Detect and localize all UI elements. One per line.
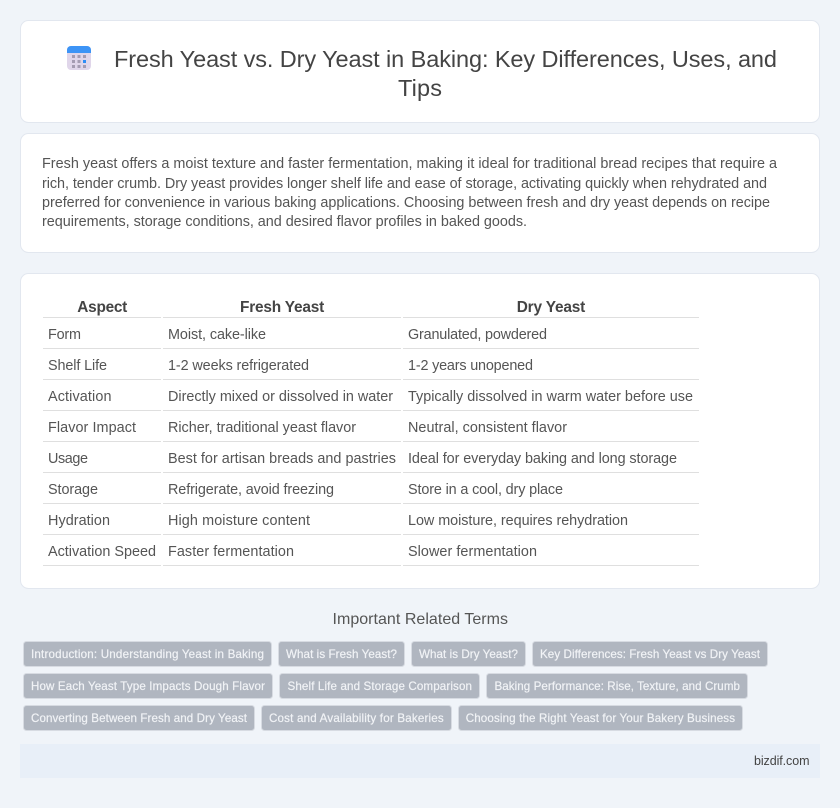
chip: cost and availability xyxy=(262,706,452,730)
row: activation: Activation xyxy=(48,389,112,405)
row: form: Moist, cake-like xyxy=(168,327,266,343)
row: hydration: Low moisture, requires rehydration xyxy=(408,513,628,529)
chip: converting xyxy=(24,706,254,730)
row: flavor impact: Neutral, consistent flavor xyxy=(408,420,567,436)
chip: choosing the right yeast xyxy=(458,706,742,730)
chip: choosing the right yeast: Choosing the Right Yeast for Your Bakery Business xyxy=(466,712,735,725)
panel: title card xyxy=(20,20,820,122)
row: usage: Best for artisan breads and pastries xyxy=(168,451,396,467)
row: usage xyxy=(48,451,677,467)
chip: what is dry yeast: What is Dry Yeast? xyxy=(419,648,519,661)
row: form: Granulated, powdered xyxy=(408,327,547,343)
row: flavor impact: Flavor Impact xyxy=(48,420,136,436)
row: hydration: High moisture content xyxy=(168,513,310,529)
chip: introduction xyxy=(24,642,272,666)
chip: what is fresh yeast: What is Fresh Yeast? xyxy=(286,648,398,661)
row: form: Form xyxy=(48,327,81,343)
table header xyxy=(77,299,585,316)
chip: shelf life and storage xyxy=(280,674,480,698)
table header: Dry Yeast xyxy=(517,299,585,316)
chip: dough flavor xyxy=(24,674,272,698)
row: storage xyxy=(48,482,563,498)
title xyxy=(114,46,777,101)
intro text: preferred for convenience in various baking applications. Choosing between fresh and dry yeast depends on recipe xyxy=(42,195,770,211)
panel: comparison table xyxy=(20,274,820,588)
row: shelf life: 1-2 weeks refrigerated xyxy=(168,358,309,374)
heading: important related terms: Important Related Terms xyxy=(332,611,508,628)
title: Fresh Yeast vs. Dry Yeast in Baking: Key Differences, Uses, and xyxy=(114,46,777,72)
row: activation speed: Activation Speed xyxy=(48,544,156,560)
row: shelf life xyxy=(48,358,533,374)
row: usage: Ideal for everyday baking and long storage xyxy=(408,451,677,467)
row: form xyxy=(48,327,547,343)
intro text: requirements, storage conditions, and desired flavor profiles in baked goods. xyxy=(42,214,527,230)
chip: key differences xyxy=(532,642,768,666)
row: flavor impact: Richer, traditional yeast flavor xyxy=(168,420,356,436)
row: flavor impact xyxy=(48,420,567,436)
icon: calendar xyxy=(67,46,91,70)
table header: Fresh Yeast xyxy=(240,299,324,316)
chip: what is fresh yeast xyxy=(278,642,404,666)
table header: Aspect xyxy=(77,299,127,316)
intro text: Fresh yeast offers a moist texture and faster fermentation, making it ideal for traditional bread recipes that require a xyxy=(42,156,777,172)
row: shelf life: 1-2 years unopened xyxy=(408,358,533,374)
row: activation speed: Faster fermentation xyxy=(168,544,294,560)
related term chips xyxy=(24,642,768,730)
panel: introduction xyxy=(20,134,820,252)
row: storage: Storage xyxy=(48,482,98,498)
chip: baking performance xyxy=(486,674,748,698)
row: usage: Usage xyxy=(48,451,88,467)
row: hydration xyxy=(48,513,628,529)
chip: introduction: Introduction: Understanding Yeast in Baking xyxy=(31,648,264,661)
table rule lines xyxy=(43,317,699,566)
row: activation: Directly mixed or dissolved in water xyxy=(168,389,393,405)
row: activation: Typically dissolved in warm water before use xyxy=(408,389,693,405)
title: Tips xyxy=(398,75,442,101)
row: hydration: Hydration xyxy=(48,513,110,529)
chip: what is dry yeast xyxy=(412,642,526,666)
intro text: rich, tender crumb. Dry yeast provides longer shelf life and ease of storage, activating quickly when rehydrated and xyxy=(42,176,767,192)
row: activation speed xyxy=(48,544,537,560)
row: shelf life: Shelf Life xyxy=(48,358,107,374)
footer bar xyxy=(20,744,820,778)
footer bar: bizdif.com xyxy=(754,754,810,768)
intro text xyxy=(42,156,777,230)
chip: key differences: Key Differences: Fresh Yeast vs Dry Yeast xyxy=(540,648,761,661)
chip: shelf life and storage: Shelf Life and Storage Comparison xyxy=(288,680,472,693)
row: activation speed: Slower fermentation xyxy=(408,544,537,560)
chip: baking performance: Baking Performance: Rise, Texture, and Crumb xyxy=(494,680,740,693)
chip: dough flavor: How Each Yeast Type Impacts Dough Flavor xyxy=(31,680,265,693)
chip: cost and availability: Cost and Availability for Bakeries xyxy=(269,712,444,725)
row: storage: Store in a cool, dry place xyxy=(408,482,563,498)
row: storage: Refrigerate, avoid freezing xyxy=(168,482,334,498)
row: activation xyxy=(48,389,693,405)
chip: converting: Converting Between Fresh and Dry Yeast xyxy=(31,712,248,725)
